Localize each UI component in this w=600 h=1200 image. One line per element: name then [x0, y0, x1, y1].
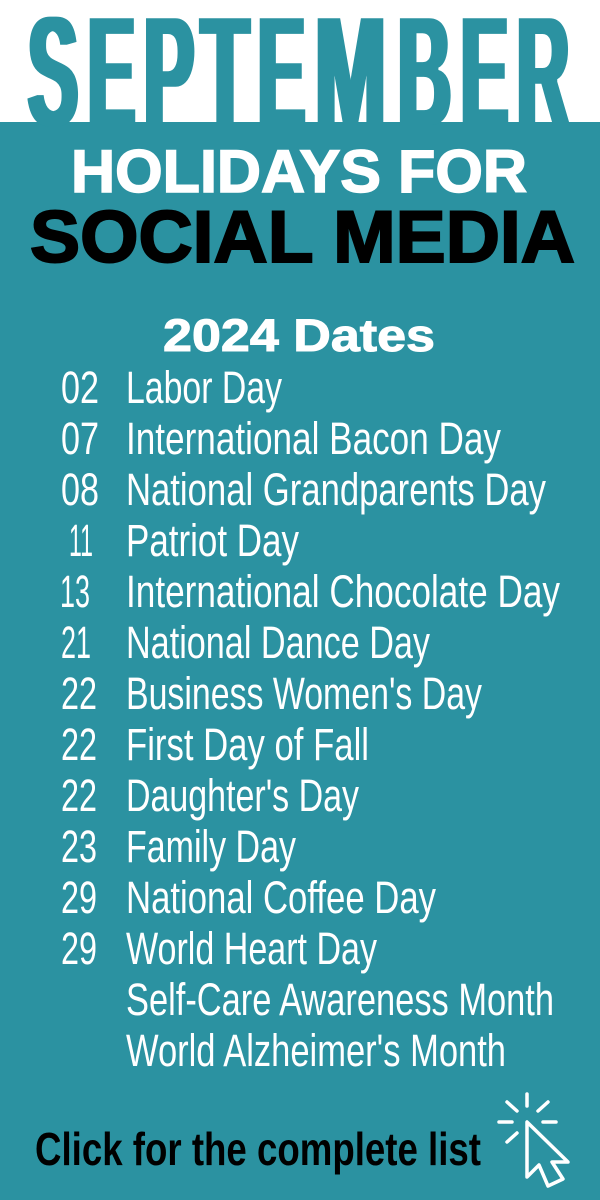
heading: Social Media: SOCIAL MEDIA [30, 197, 575, 278]
row: 08 date number: 08 [61, 464, 99, 515]
row: Family Day: Family Day [126, 821, 296, 872]
row: Business Women's Day: Business Women's Day [126, 668, 482, 719]
row: International Bacon Day: International Bacon Day [126, 413, 501, 464]
row: 21 date number: 21 [61, 617, 91, 668]
title: September [28, 0, 569, 160]
heading: Holidays for: HOLIDAYS FOR [71, 138, 527, 205]
call to action: Click for the complete list [35, 1123, 481, 1175]
row: 29 date number: 29 [61, 923, 97, 974]
row: 22 date number: 22 [61, 770, 97, 821]
icon: clicking cursor [499, 1094, 568, 1186]
list: holiday dates [60, 362, 560, 1076]
row: 29 date number: 29 [61, 872, 97, 923]
row: National Coffee Day: National Coffee Day [126, 872, 436, 923]
row: First Day of Fall: First Day of Fall [126, 719, 369, 770]
row: 23 date number: 23 [61, 821, 97, 872]
row: Daughter's Day: Daughter's Day [126, 770, 359, 821]
row: World Heart Day: World Heart Day [126, 923, 377, 974]
row: 02 date number: 02 [61, 362, 99, 413]
row: 13 date number: 13 [60, 566, 90, 617]
row: 22 date number: 22 [61, 719, 97, 770]
row: National Dance Day: National Dance Day [126, 617, 430, 668]
row: 07 date number: 07 [61, 413, 99, 464]
row: 22 date number: 22 [61, 668, 97, 719]
subheading: 2024 Dates: 2024 Dates [163, 310, 435, 361]
row: 11 date number: 11 [69, 515, 93, 566]
row: Labor Day: Labor Day [126, 362, 282, 413]
row: Patriot Day: Patriot Day [126, 515, 299, 566]
